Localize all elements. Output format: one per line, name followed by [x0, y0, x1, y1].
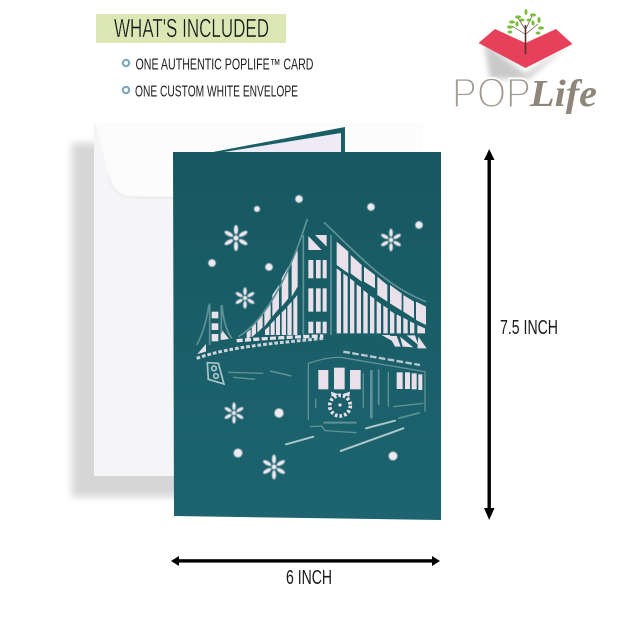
label: height: 7.5 INCH [500, 317, 558, 339]
arrow: height [484, 149, 494, 520]
envelope shadow [72, 143, 192, 497]
logo: PopLife [452, 9, 597, 116]
illustration: golden gate bridge [197, 219, 427, 358]
snow dots [208, 195, 423, 460]
list: included items [123, 56, 314, 100]
heading: what's included [96, 14, 286, 43]
label: width: 6 INCH [286, 567, 332, 589]
heading: what's included: WHAT'S INCLUDED [114, 15, 269, 43]
card back flap [213, 127, 345, 152]
illustration: cable car [207, 352, 425, 451]
card front [173, 152, 441, 520]
logo: PopLife: POP [452, 69, 531, 116]
arrow: width [171, 556, 440, 566]
envelope [94, 122, 423, 476]
list: included items: ONE CUSTOM WHITE ENVELOPE [135, 84, 298, 100]
snowflakes [224, 225, 402, 479]
list: included items: ONE AUTHENTIC POPLIFE™ CARD [136, 56, 314, 74]
logo: PopLife: Life [529, 73, 597, 115]
